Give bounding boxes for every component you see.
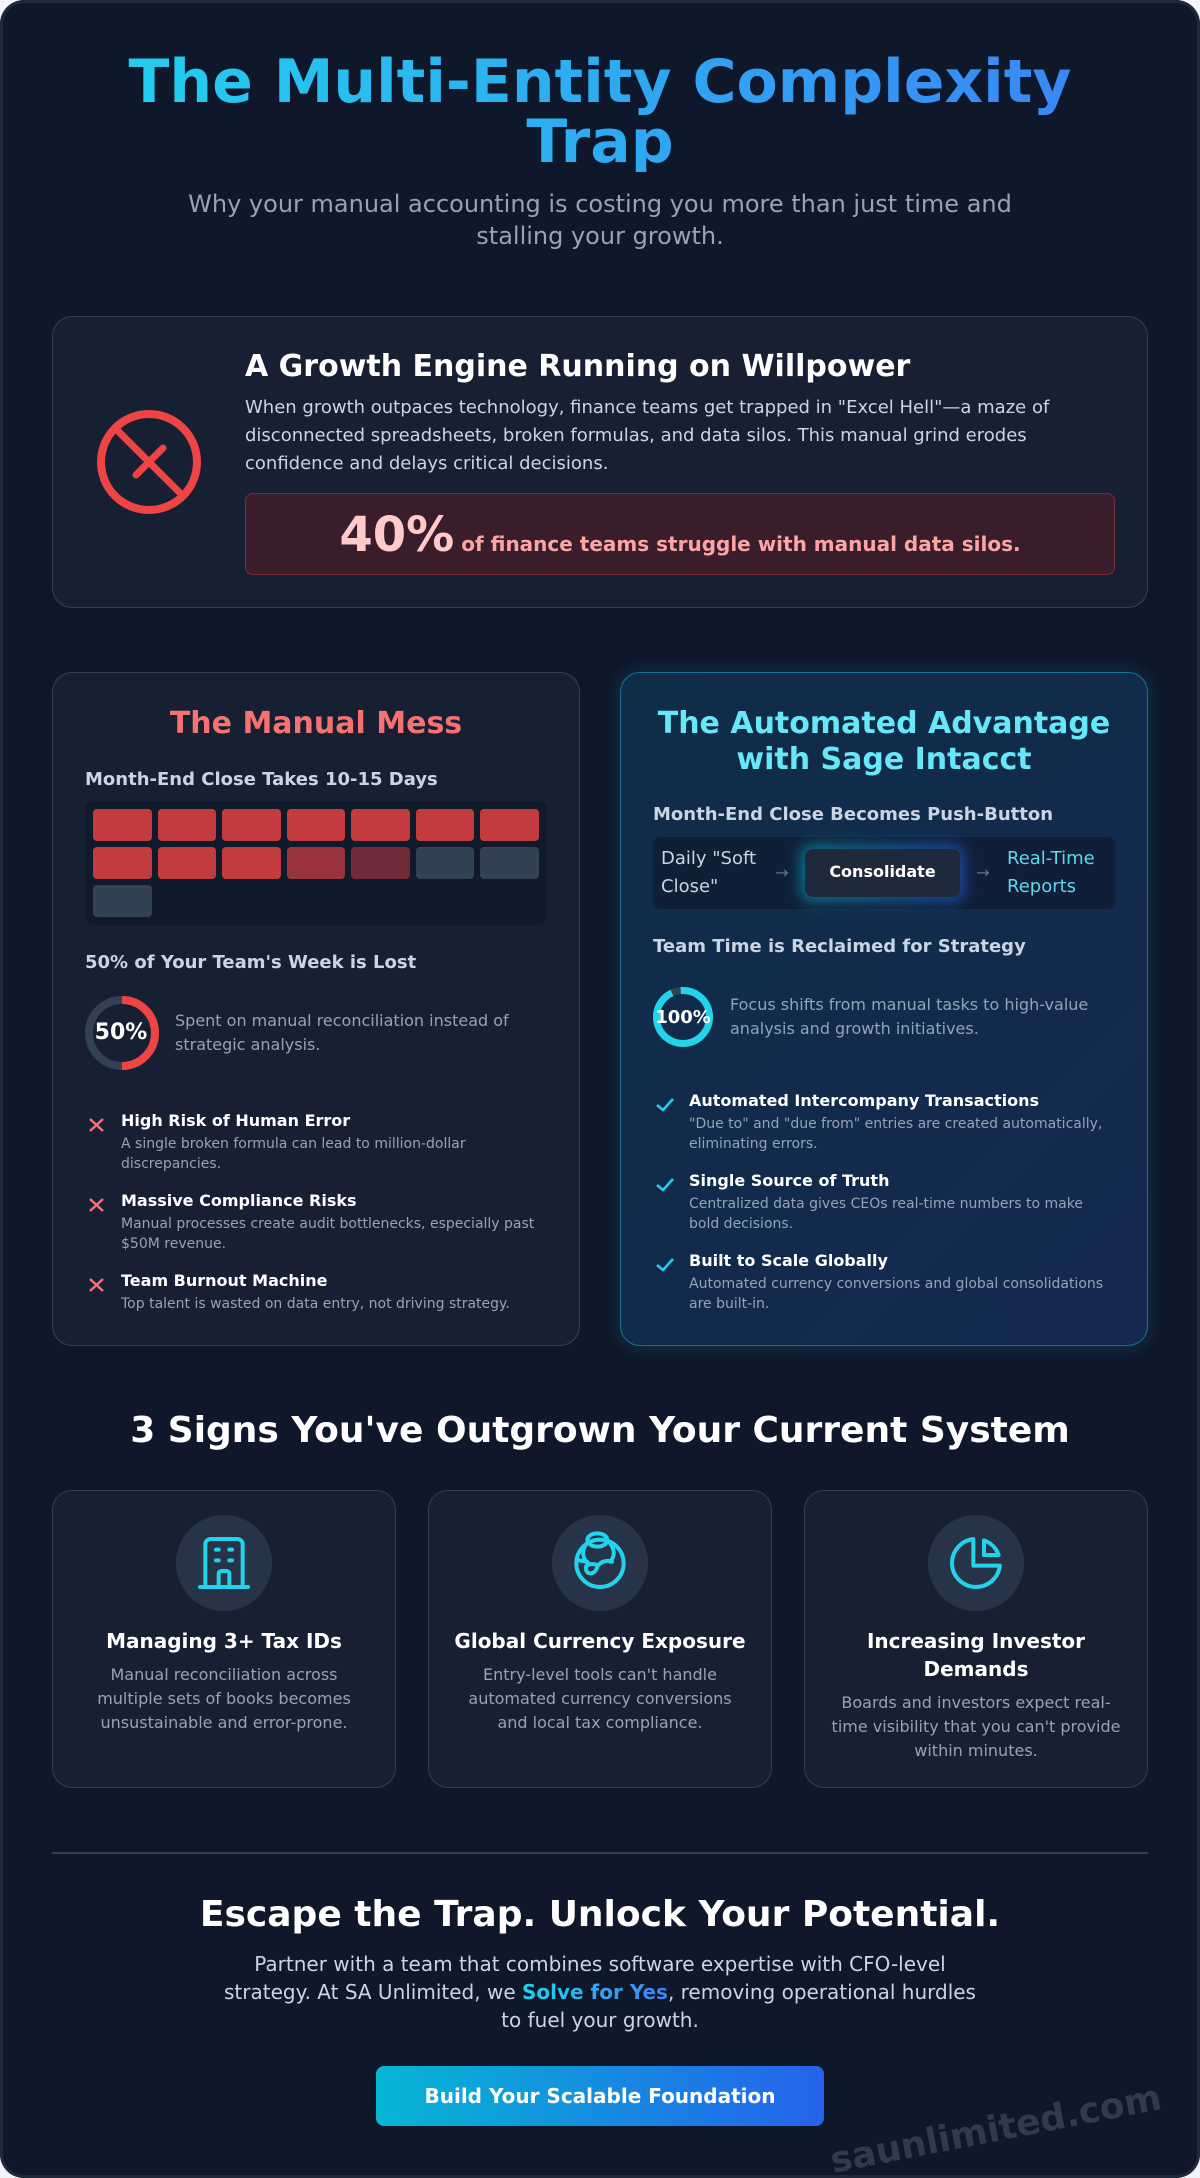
panel: the manual mess bbox=[52, 672, 580, 1346]
title: Trap bbox=[526, 107, 674, 177]
donut chart: 100 percent bbox=[653, 987, 713, 1047]
item description: Automated currency conversions and global consolidations bbox=[689, 1276, 1103, 1292]
item title: Automated Intercompany Transactions bbox=[689, 1091, 1039, 1110]
icon: building bbox=[198, 1537, 250, 1589]
heading: growth engine: A Growth Engine Running on Willpower bbox=[245, 349, 910, 384]
text: partner: Partner with a team that combines software expertise with CFO-level bbox=[254, 1952, 946, 1976]
subheading: month-end close: Month-End Close Takes 10-15 Days bbox=[85, 769, 438, 790]
benefit: scale globally bbox=[656, 1251, 1103, 1312]
icon: cross bbox=[89, 1278, 104, 1292]
item description: discrepancies. bbox=[121, 1156, 221, 1172]
card text: within minutes. bbox=[914, 1741, 1038, 1760]
benefit: single source bbox=[656, 1171, 1083, 1232]
icon: globe bbox=[574, 1531, 626, 1589]
text: partner: strategy. At SA Unlimited, we Solve for Yes, removing operational hurdles bbox=[224, 1980, 976, 2004]
item description: eliminating errors. bbox=[689, 1136, 818, 1152]
section: call to action bbox=[200, 1894, 1000, 2126]
item description: A single broken formula can lead to million-dollar bbox=[121, 1136, 466, 1152]
item title: Massive Compliance Risks bbox=[121, 1191, 357, 1210]
text: growth engine description: disconnected spreadsheets, broken formulas, and data silos. This manual grind erodes bbox=[245, 425, 1027, 446]
text: partner: to fuel your growth. bbox=[501, 2008, 699, 2032]
heading: manual mess: The Manual Mess bbox=[170, 706, 462, 741]
item description: are built-in. bbox=[689, 1296, 769, 1312]
card text bbox=[97, 1665, 351, 1732]
icon background bbox=[176, 1515, 272, 1611]
card text: multiple sets of books becomes bbox=[97, 1689, 351, 1708]
card text: Manual reconciliation across bbox=[110, 1665, 337, 1684]
card: tax IDs bbox=[52, 1490, 396, 1788]
item description: "Due to" and "due from" entries are created automatically, bbox=[689, 1116, 1102, 1132]
card text bbox=[468, 1665, 732, 1732]
heading: automated advantage: with Sage Intacct bbox=[736, 742, 1032, 777]
text: reconciliation bbox=[175, 1011, 509, 1054]
icon: check bbox=[656, 1178, 674, 1192]
heading: automated advantage bbox=[658, 706, 1110, 777]
flow step: soft close: Daily "Soft bbox=[661, 848, 756, 869]
icon: pie chart bbox=[950, 1537, 1002, 1589]
text: focus shifts: Focus shifts from manual tasks to high-value bbox=[730, 995, 1088, 1014]
benefit: intercompany bbox=[656, 1091, 1102, 1152]
item title: Team Burnout Machine bbox=[121, 1271, 327, 1290]
card title: Managing 3+ Tax IDs bbox=[106, 1629, 342, 1653]
item description: Top talent is wasted on data entry, not driving strategy. bbox=[121, 1296, 510, 1312]
text: reconciliation: Spent on manual reconciliation instead of bbox=[175, 1011, 509, 1030]
text: reconciliation: strategic analysis. bbox=[175, 1035, 320, 1054]
consolidate button: Consolidate bbox=[829, 862, 936, 881]
subtitle: Why your manual accounting is costing you more than just time and bbox=[188, 190, 1012, 218]
card title: Global Currency Exposure bbox=[454, 1629, 746, 1653]
donut chart: 100 percent: 100% bbox=[655, 1007, 711, 1028]
subtitle: stalling your growth. bbox=[476, 222, 724, 250]
item description: bold decisions. bbox=[689, 1216, 793, 1232]
arrow: → bbox=[976, 863, 990, 882]
subheading: team week lost: 50% of Your Team's Week is Lost bbox=[85, 952, 416, 973]
icon: cross bbox=[89, 1198, 104, 1212]
donut chart: 50 percent bbox=[85, 996, 159, 1070]
item description bbox=[689, 1276, 1103, 1312]
item description bbox=[121, 1136, 466, 1172]
card text: and local tax compliance. bbox=[497, 1713, 703, 1732]
calendar grid bbox=[85, 801, 547, 925]
text: partner bbox=[224, 1952, 976, 2032]
card text: Entry-level tools can't handle bbox=[483, 1665, 717, 1684]
icon: cross bbox=[89, 1118, 104, 1132]
icon: check bbox=[656, 1098, 674, 1112]
flow step: reports: Reports bbox=[1007, 876, 1076, 897]
flow step: soft close: Close" bbox=[661, 876, 718, 897]
text: growth engine description: When growth outpaces technology, finance teams get trapped in "Excel Hell"—a maze of bbox=[245, 397, 1049, 418]
card: currency bbox=[428, 1490, 772, 1788]
text: focus shifts: analysis and growth initiatives. bbox=[730, 1019, 979, 1038]
icon background bbox=[552, 1515, 648, 1611]
card: investors bbox=[804, 1490, 1148, 1788]
risk: burnout bbox=[89, 1271, 510, 1312]
icon background bbox=[928, 1515, 1024, 1611]
flow step: reports bbox=[1007, 848, 1095, 897]
heading: three signs: 3 Signs You've Outgrown Your Current System bbox=[130, 1410, 1070, 1451]
card text: time visibility that you can't provide bbox=[832, 1717, 1120, 1736]
icon: prohibited cross bbox=[97, 410, 201, 514]
item description: $50M revenue. bbox=[121, 1236, 226, 1252]
callout: 40 percent stat bbox=[245, 493, 1115, 575]
subtitle bbox=[188, 190, 1012, 250]
card text: Boards and investors expect real- bbox=[841, 1693, 1111, 1712]
text: focus shifts bbox=[730, 995, 1088, 1038]
panel: the automated advantage bbox=[620, 672, 1148, 1346]
heading: automated advantage: The Automated Advantage bbox=[658, 706, 1110, 741]
flow: soft close to reports bbox=[653, 837, 1115, 909]
card title: Demands bbox=[924, 1657, 1028, 1681]
flow step: soft close bbox=[661, 848, 756, 897]
title: The Multi-Entity Complexity bbox=[128, 47, 1072, 117]
item title: High Risk of Human Error bbox=[121, 1111, 350, 1130]
item title: Built to Scale Globally bbox=[689, 1251, 888, 1270]
subheading: push-button close: Month-End Close Becomes Push-Button bbox=[653, 804, 1053, 825]
consolidate button bbox=[792, 836, 974, 910]
item description bbox=[121, 1216, 534, 1252]
risk: human error bbox=[89, 1111, 466, 1172]
text: growth engine description bbox=[245, 397, 1050, 474]
subheading: team time: Team Time is Reclaimed for Strategy bbox=[653, 936, 1026, 957]
title bbox=[52, 52, 1148, 172]
card text: automated currency conversions bbox=[468, 1689, 732, 1708]
heading: escape the trap: Escape the Trap. Unlock Your Potential. bbox=[200, 1894, 1000, 1935]
card text: unsustainable and error-prone. bbox=[100, 1713, 348, 1732]
item title: Single Source of Truth bbox=[689, 1171, 889, 1190]
button: build foundation bbox=[376, 2066, 824, 2126]
item description bbox=[689, 1196, 1083, 1232]
item description bbox=[689, 1116, 1102, 1152]
card title: Increasing Investor bbox=[867, 1629, 1085, 1653]
card title bbox=[867, 1629, 1085, 1681]
callout: 40 percent stat: 40% of finance teams struggle with manual data silos. bbox=[339, 507, 1021, 563]
item description: Centralized data gives CEOs real-time numbers to make bbox=[689, 1196, 1083, 1212]
flow step: reports: Real-Time bbox=[1007, 848, 1095, 869]
panel: growth engine bbox=[52, 316, 1148, 608]
risk: compliance bbox=[89, 1191, 534, 1252]
arrow: → bbox=[775, 863, 789, 882]
text: growth engine description: confidence and delays critical decisions. bbox=[245, 453, 608, 474]
card text bbox=[832, 1693, 1120, 1760]
item description: Manual processes create audit bottlenecks, especially past bbox=[121, 1216, 534, 1232]
button: build foundation: Build Your Scalable Foundation bbox=[424, 2084, 776, 2108]
icon: check bbox=[656, 1258, 674, 1272]
donut chart: 50 percent: 50% bbox=[95, 1020, 147, 1045]
